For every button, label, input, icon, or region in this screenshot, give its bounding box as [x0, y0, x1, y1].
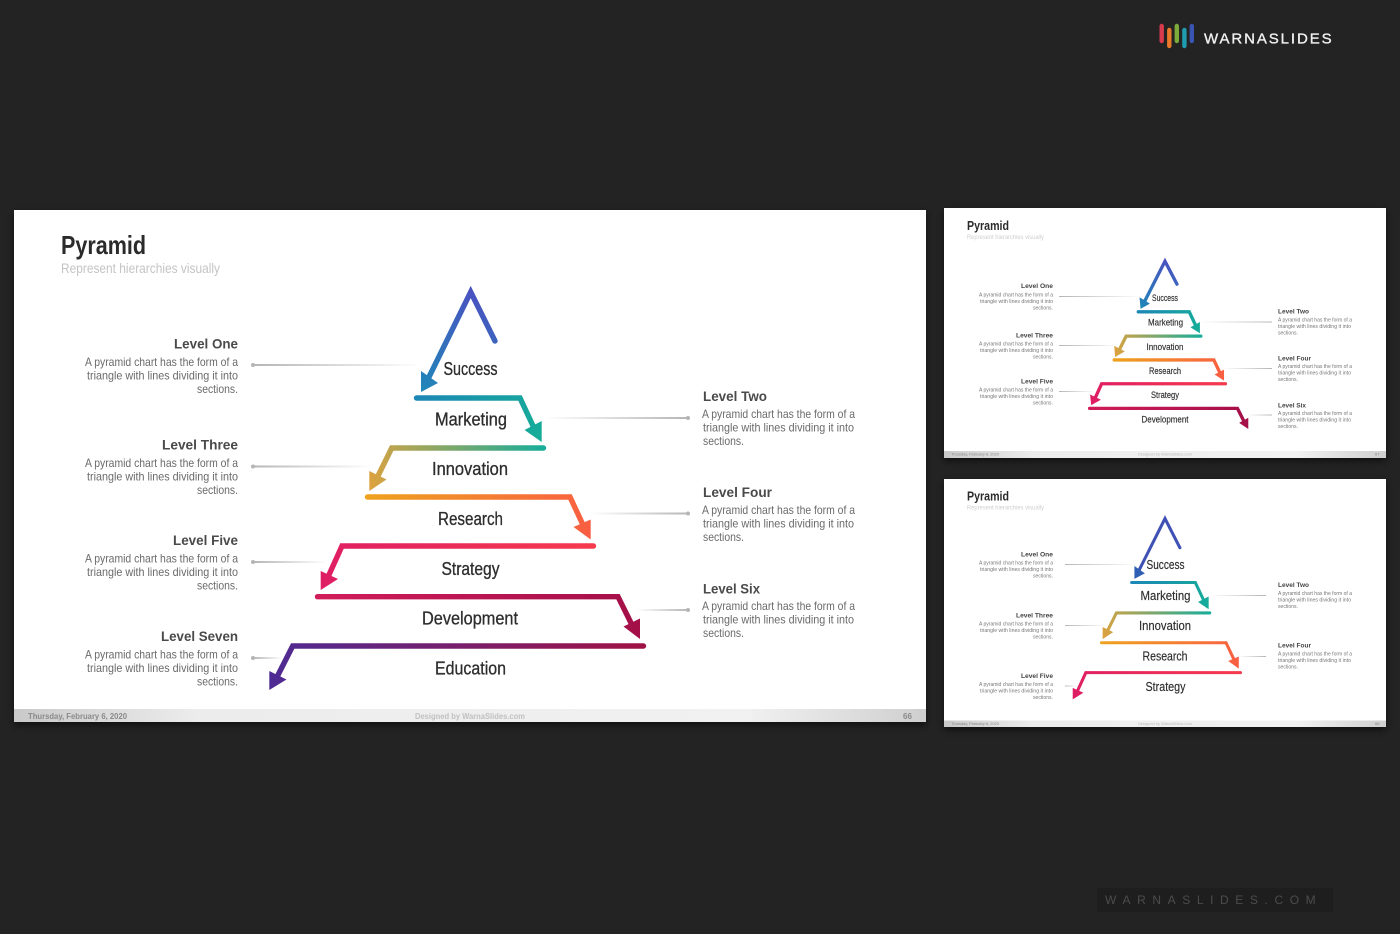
text block: Level One: A pyramid chart has the form of a: [979, 292, 1053, 298]
text block: Level Three: triangle with lines dividing it into: [980, 628, 1053, 634]
text block: Level Two: Level Two: [1278, 308, 1309, 316]
text block: Level Four: A pyramid chart has the form of a: [702, 503, 855, 517]
text block: Level Five: [85, 532, 238, 592]
chart labels: Development: [1142, 414, 1189, 424]
text block: Level Three: triangle with lines dividing it into: [980, 348, 1053, 354]
chart labels: Marketing: [1148, 318, 1183, 328]
chart labels: [1142, 293, 1189, 424]
text block: Level Six: [702, 580, 855, 640]
chart labels: [422, 359, 518, 678]
text block: Level One: Level One: [174, 336, 238, 352]
text block: Level Six: A pyramid chart has the form of a: [702, 599, 855, 613]
text block: Level Seven: Level Seven: [161, 628, 238, 644]
slide footer: Designed by WarnaSlides.com: [1138, 452, 1193, 456]
text block: Level Four: A pyramid chart has the form of a: [1278, 652, 1352, 658]
text block: Level One: A pyramid chart has the form of a: [979, 560, 1053, 566]
text block: Level One: Level One: [1021, 283, 1053, 290]
text block: Level Three: A pyramid chart has the form of a: [85, 456, 238, 470]
text block: Level Seven: A pyramid chart has the form of a: [85, 648, 238, 662]
watermark: WarnaSlides.com: [1097, 888, 1333, 912]
watermark: WarnaSlides.com: WARNASLIDES.COM: [1105, 893, 1322, 907]
slide footer: Designed by WarnaSlides.com: [1138, 721, 1193, 726]
text block: Level Five: sections.: [197, 578, 238, 592]
text block: Level Six: triangle with lines dividing it into: [1278, 418, 1351, 424]
text block: Level Five: A pyramid chart has the form of a: [85, 552, 238, 566]
text block: Level Four: triangle with lines dividing it into: [1278, 370, 1351, 376]
chart: seven-level pyramid arrows: [269, 292, 644, 690]
chart labels: Marketing: [435, 410, 507, 430]
text block: Level Three: A pyramid chart has the form of a: [979, 622, 1053, 628]
text block: Level Four: sections.: [1278, 664, 1298, 670]
logo wordmark: WARNASLIDES: [1204, 30, 1334, 48]
slide background: [944, 479, 1386, 727]
slide footer: 67: [1375, 452, 1380, 456]
text block: Level Two: [702, 388, 855, 448]
panel: top-right slide thumbnail: [944, 208, 1386, 458]
text block: Level Three: sections.: [1033, 634, 1053, 640]
text block: Level Two: Level Two: [703, 388, 767, 404]
panel: bottom-right slide thumbnail: [944, 479, 1386, 727]
text block: Level Four: triangle with lines dividing it into: [1278, 658, 1351, 664]
text block: Level Seven: triangle with lines dividing it into: [87, 661, 238, 675]
text block: Level Two: [1278, 308, 1352, 336]
text block: Level Seven: [85, 628, 238, 688]
text block: Level Five: triangle with lines dividing it into: [87, 565, 238, 579]
text block: Level Six: A pyramid chart has the form of a: [1278, 411, 1352, 417]
text block: Level Five: Level Five: [173, 532, 238, 548]
text block: Level Two: [1278, 582, 1352, 610]
panel: main slide: [14, 210, 926, 722]
text block: Level Two: sections.: [703, 434, 744, 448]
text block: Level One: sections.: [1033, 574, 1053, 580]
text block: Level Two: sections.: [1278, 330, 1298, 336]
text block: Level Five: A pyramid chart has the form of a: [979, 388, 1053, 394]
slide footer: 68: [1375, 721, 1380, 726]
text block: Level One: A pyramid chart has the form of a: [85, 355, 238, 369]
chart labels: Innovation: [1139, 619, 1191, 633]
chart labels: Strategy: [1146, 680, 1186, 694]
chart labels: Research: [1149, 366, 1181, 376]
connector lines: [1065, 564, 1266, 686]
text block: Level Five: [979, 673, 1053, 701]
text block: Level One: [85, 336, 238, 396]
text block: Level Two: triangle with lines dividing it into: [1278, 324, 1351, 330]
slide footer: Designed by WarnaSlides.com: [415, 712, 525, 721]
subtitle: Represent hierarchies visually: [61, 260, 220, 276]
text block: Level Five: triangle with lines dividing it into: [980, 394, 1053, 400]
text block: Level Four: [1278, 356, 1352, 383]
title: Pyramid: [967, 490, 1009, 504]
chart labels: Strategy: [442, 559, 500, 579]
text block: Level One: triangle with lines dividing it into: [980, 567, 1053, 573]
text block: Level Three: A pyramid chart has the form of a: [979, 342, 1053, 348]
text block: Level Four: sections.: [703, 530, 744, 544]
text block: Level Two: triangle with lines dividing it into: [1278, 598, 1351, 604]
text block: Level Four: Level Four: [1278, 356, 1311, 362]
logo: WarnaSlides: [1162, 26, 1334, 48]
chart labels: [1139, 558, 1191, 694]
text block: Level Six: Level Six: [1278, 402, 1306, 410]
text block: Level Six: Level Six: [703, 580, 760, 596]
slide background: [14, 210, 926, 722]
text block: Level Six: triangle with lines dividing it into: [703, 612, 854, 626]
text block: Level Five: sections.: [1033, 400, 1053, 406]
text block: Level Four: triangle with lines dividing it into: [703, 516, 854, 530]
text block: Level Two: sections.: [1278, 604, 1298, 610]
text block: Level One: triangle with lines dividing it into: [87, 368, 238, 382]
chart labels: Marketing: [1140, 589, 1191, 603]
text block: Level Five: triangle with lines dividing it into: [980, 688, 1053, 694]
text block: Level Four: [702, 484, 855, 544]
chart labels: Development: [422, 608, 518, 628]
text block: Level One: sections.: [1033, 306, 1053, 312]
text block: Level Two: A pyramid chart has the form of a: [1278, 318, 1352, 324]
chart labels: Success: [1146, 558, 1184, 572]
chart labels: Research: [438, 509, 503, 529]
slide footer: Thursday, February 6, 2020: [28, 712, 128, 721]
text block: Level Three: triangle with lines dividing it into: [87, 470, 238, 484]
subtitle: Represent hierarchies visually: [967, 504, 1045, 512]
text block: Level Three: Level Three: [162, 436, 238, 452]
text block: Level Five: [979, 378, 1053, 406]
text block: Level Two: A pyramid chart has the form of a: [1278, 591, 1352, 597]
chart labels: Education: [435, 658, 506, 678]
chart labels: Innovation: [432, 459, 508, 479]
text block: Level Four: A pyramid chart has the form of a: [1278, 364, 1352, 370]
text block: Level Two: Level Two: [1278, 582, 1309, 589]
chart: six-level pyramid arrows: [1090, 261, 1248, 429]
text block: Level Three: sections.: [1033, 354, 1053, 360]
icon: colored bars: [1162, 26, 1192, 46]
text block: Level One: sections.: [197, 382, 238, 396]
chart labels: Success: [444, 359, 498, 379]
text block: Level Six: [1278, 402, 1352, 430]
subtitle: Represent hierarchies visually: [967, 234, 1045, 241]
text block: Level Three: [979, 612, 1053, 640]
slide footer: Thursday, February 6, 2020: [951, 452, 1000, 456]
text block: Level Five: Level Five: [1021, 673, 1053, 680]
text block: Level Two: triangle with lines dividing it into: [703, 420, 854, 434]
text block: Level Three: sections.: [197, 483, 238, 497]
text block: Level One: [979, 552, 1053, 580]
chart labels: Success: [1152, 293, 1178, 303]
text block: Level One: triangle with lines dividing it into: [980, 299, 1053, 305]
slide footer: Thursday, February 6, 2020: [951, 721, 1000, 726]
text block: Level Three: Level Three: [1016, 612, 1053, 620]
text block: Level One: [979, 283, 1053, 312]
slide background: [944, 208, 1386, 458]
slide footer: [944, 720, 1386, 727]
text block: Level Four: Level Four: [703, 484, 773, 500]
title: Pyramid: [967, 219, 1009, 233]
text block: Level Seven: sections.: [197, 674, 238, 688]
slide footer: [14, 709, 926, 722]
slide footer: [944, 451, 1386, 458]
connector lines: [1059, 296, 1272, 416]
chart: five-level pyramid arrows: [1073, 519, 1241, 699]
text block: Level Five: Level Five: [1021, 378, 1053, 386]
text block: Level Four: [1278, 642, 1352, 670]
title: Pyramid: [61, 230, 146, 260]
slide footer: 66: [903, 712, 912, 721]
text block: Level Three: Level Three: [1016, 332, 1053, 340]
text block: Level Four: Level Four: [1278, 642, 1311, 650]
chart labels: Strategy: [1151, 390, 1179, 400]
text block: Level Six: sections.: [703, 626, 744, 640]
connector lines: [251, 363, 690, 660]
chart labels: Innovation: [1146, 342, 1184, 352]
text block: Level Five: A pyramid chart has the form of a: [979, 682, 1053, 688]
text block: Level Six: sections.: [1278, 424, 1298, 430]
text block: Level Two: A pyramid chart has the form of a: [702, 407, 855, 421]
text block: Level Three: [979, 332, 1053, 360]
text block: Level Four: sections.: [1278, 377, 1298, 383]
chart labels: Research: [1142, 650, 1188, 664]
text block: Level One: Level One: [1021, 552, 1053, 558]
text block: Level Five: sections.: [1033, 695, 1053, 701]
text block: Level Three: [85, 436, 238, 497]
